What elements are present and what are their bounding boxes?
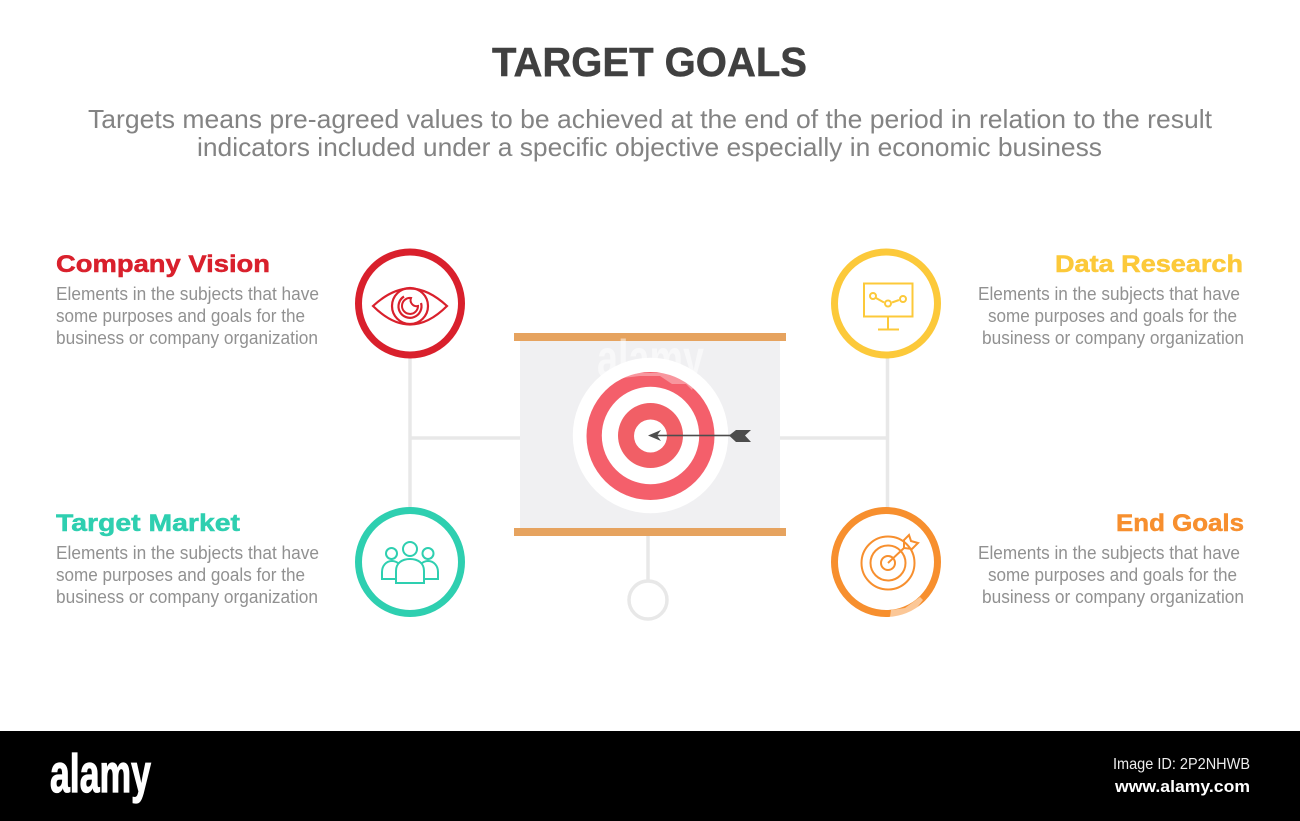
panel: end goals [978, 510, 1244, 607]
text block: end goals: some purposes and goals for the [988, 565, 1237, 585]
text block: data research [978, 284, 1244, 348]
text block: end goals: business or company organization [982, 587, 1244, 607]
top roller bar [514, 333, 786, 341]
faint watermark on screen: alamy [597, 330, 704, 388]
text block: company vision: business or company organization [56, 328, 318, 348]
circle icon: end goals target [834, 510, 938, 617]
text block: target market [56, 543, 319, 607]
heading: end goals: End Goals [1116, 510, 1244, 537]
bottom roller bar [514, 528, 786, 536]
pull ring [629, 581, 667, 619]
panel: company vision [56, 251, 319, 348]
text block: data research: business or company organization [982, 328, 1244, 348]
watermark fragments on target ring [620, 373, 696, 390]
website: www.alamy.com [1114, 777, 1250, 796]
heading: company vision: Company Vision [56, 251, 270, 278]
footer bar [0, 731, 1300, 821]
text block: data research: some purposes and goals for the [988, 306, 1237, 326]
circle icon: target market people [358, 510, 462, 614]
circle icon: data research chart [834, 252, 938, 355]
text block: company vision [56, 284, 319, 348]
text block: target market: some purposes and goals for the [56, 565, 305, 585]
text block: data research: Elements in the subjects that have [978, 284, 1240, 304]
text block: target market: Elements in the subjects that have [56, 543, 319, 563]
text block: end goals: Elements in the subjects that have [978, 543, 1240, 563]
title: TARGET GOALS [492, 39, 807, 85]
subtitle text block: Targets means pre-agreed values to be achieved at the end of the period in relation to the result [88, 104, 1213, 134]
subtitle text block [88, 104, 1213, 162]
presentation screen with target [514, 330, 786, 536]
connector lines [410, 355, 888, 582]
subtitle text block: indicators included under a specific objective especially in economic business [197, 132, 1102, 162]
panel: target market [56, 510, 319, 607]
text block: company vision: some purposes and goals for the [56, 306, 305, 326]
footer logo: alamy [50, 744, 151, 804]
circle icon: company vision eye [358, 252, 462, 355]
image id: Image ID: 2P2NHWB [1113, 756, 1250, 773]
bullseye target [573, 358, 728, 513]
text block: company vision: Elements in the subjects that have [56, 284, 319, 304]
arrow in bullseye [648, 430, 751, 442]
text block: end goals [978, 543, 1244, 607]
text block: target market: business or company organization [56, 587, 318, 607]
panel: data research [978, 251, 1244, 348]
heading: data research: Data Research [1055, 251, 1243, 278]
screen panel [520, 340, 780, 529]
heading: target market: Target Market [56, 510, 240, 537]
